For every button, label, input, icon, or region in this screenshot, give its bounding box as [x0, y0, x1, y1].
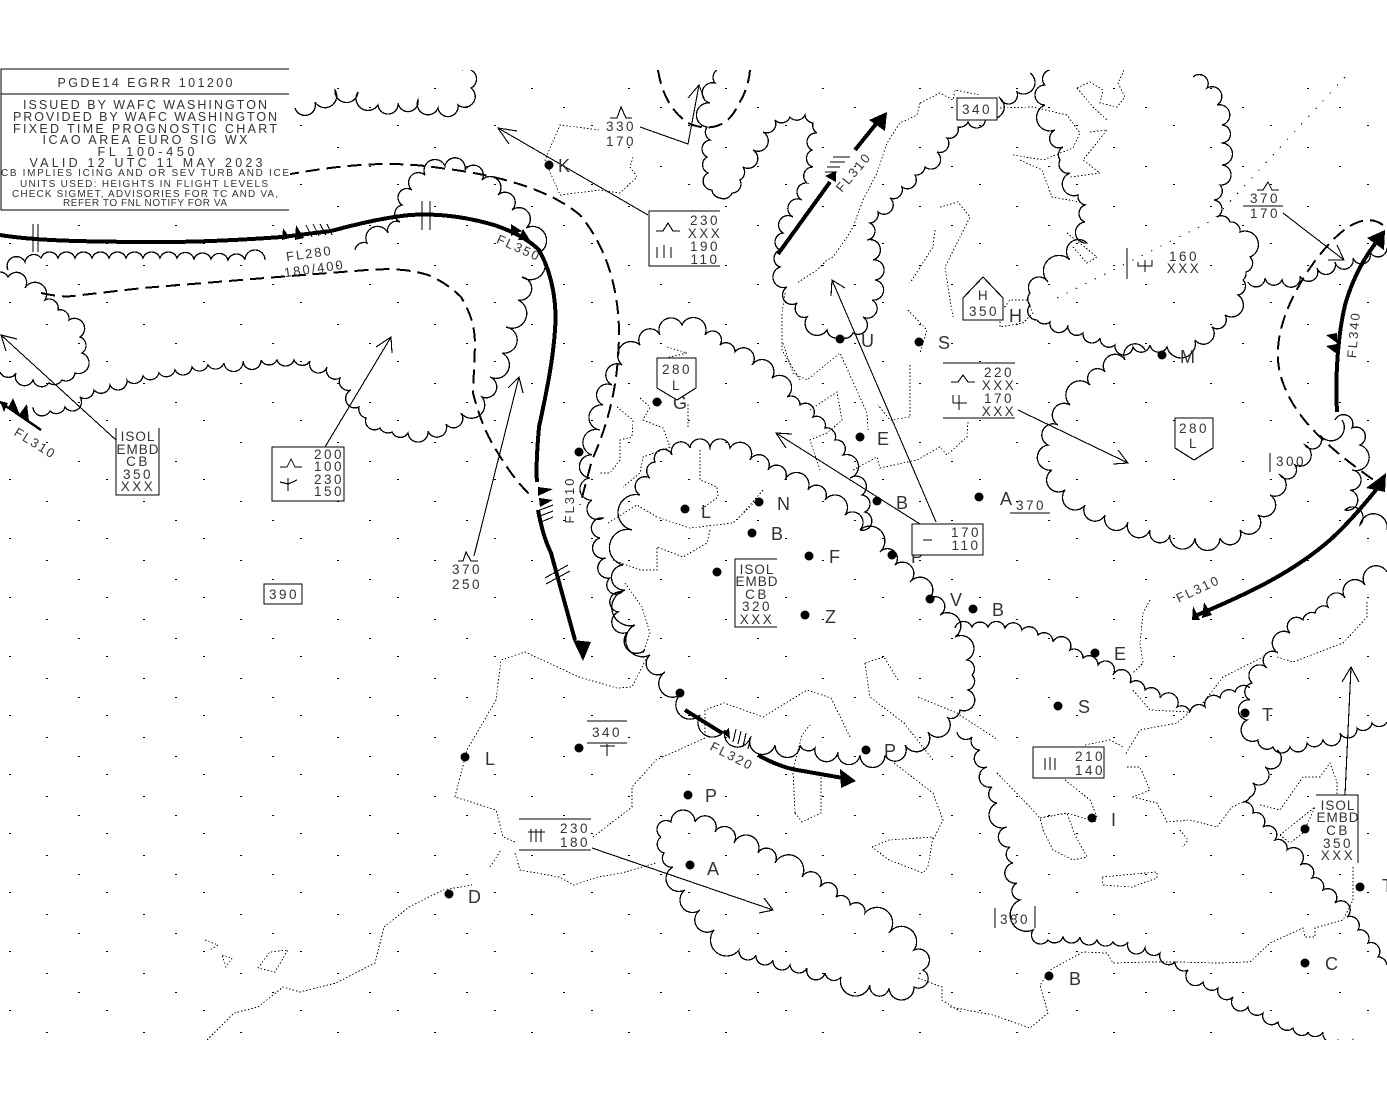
- issuer text: UNITS USED: HEIGHTS IN FLIGHT LEVELS: [20, 179, 268, 190]
- CB box middle east: XXX: [1321, 848, 1355, 863]
- icing box germany: 110: [951, 538, 981, 553]
- tropopause hexagon H 350: [963, 277, 1003, 320]
- arrow: to mediterranean: [592, 848, 773, 913]
- CB box france: 320: [742, 599, 772, 614]
- arrow: to east: [1283, 213, 1344, 260]
- city labels: E: [1114, 644, 1126, 664]
- rotated flight level labels: FL310: [1174, 572, 1223, 606]
- jet: FL310 west: [0, 398, 41, 430]
- city labels: U: [861, 331, 874, 351]
- icing box spain 340: [587, 721, 627, 756]
- cloud: atlantic west lobe: [0, 272, 89, 387]
- CAT area: north sea: [658, 70, 750, 127]
- jet: FL340 east: [1326, 230, 1385, 412]
- tropopause label 300 russia: 300: [1276, 454, 1306, 469]
- city labels: L: [485, 749, 495, 769]
- turbulence box atlantic: 230: [314, 472, 344, 487]
- city labels: P: [884, 741, 896, 761]
- CB box middle east: [1316, 795, 1360, 863]
- jet: FL320 mediterranean: [685, 710, 856, 788]
- coastlines: [205, 68, 1367, 1040]
- cloud: western europe outer: [579, 317, 872, 653]
- turbulence box poland: [943, 363, 1016, 419]
- cloud: russia north: [1028, 70, 1387, 358]
- city labels: B: [1069, 969, 1081, 989]
- icing label 160 north russia: XXX: [1167, 261, 1201, 276]
- tropopause hexagon 280 east: [1175, 418, 1213, 460]
- CB box middle east: ISOL: [1321, 798, 1355, 813]
- tropopause label 370 east: 370: [1250, 191, 1280, 206]
- tropopause hexagon 280 east: L: [1189, 436, 1199, 451]
- tropopause label 330: 330: [606, 119, 636, 134]
- city labels: H: [1009, 306, 1022, 326]
- jet streams: [0, 112, 1386, 788]
- cloud: atlantic band: [7, 158, 547, 442]
- rotated flight level labels: FL280: [285, 243, 334, 264]
- issuer text: CHECK SIGMET, ADVISORIES FOR TC AND VA,: [12, 189, 278, 200]
- cloud: central europe: [609, 439, 975, 768]
- rotated flight level labels: FL310: [12, 424, 59, 462]
- arrow: to russia: [1018, 410, 1128, 464]
- turbulence box poland: XXX: [982, 378, 1016, 393]
- CB box middle east: EMBD: [1316, 810, 1360, 825]
- turbulence box poland: 220: [984, 365, 1014, 380]
- turbulence box iceland: 230: [690, 213, 720, 228]
- CAT area: north Atlantic: [285, 164, 619, 505]
- city labels: F: [829, 547, 840, 567]
- icing box iberia: 180: [560, 835, 590, 850]
- arrow: to scandinavia: [831, 280, 936, 522]
- tropopause label 380 africa: 380: [1000, 912, 1030, 927]
- tropopause label 300 russia: [1270, 453, 1306, 472]
- tropopause box 340 north: 340: [962, 102, 992, 117]
- CB box france: XXX: [740, 612, 774, 627]
- city labels: T: [1262, 705, 1273, 725]
- icing box germany: [912, 524, 983, 555]
- city labels: E: [877, 429, 889, 449]
- turbulence box iceland: 110: [690, 252, 720, 267]
- city labels: V: [950, 590, 962, 610]
- city labels: A: [1000, 489, 1012, 509]
- high tropopause hexagon 280 L: [657, 358, 696, 400]
- arrow: to north sea: [640, 85, 705, 144]
- city labels: G: [673, 393, 687, 413]
- turbulence box atlantic: 200: [314, 447, 344, 462]
- city labels: B: [896, 493, 908, 513]
- high tropopause hexagon 280 L: 280: [662, 362, 692, 377]
- tropopause box 340 north: [957, 98, 997, 120]
- cloud: eastern mediterranean: [955, 621, 1387, 1050]
- arrow: to middle east: [1342, 667, 1359, 795]
- issuer text: ICAO AREA EURO SIG WX: [42, 133, 248, 147]
- issuer text: ISSUED BY WAFC WASHINGTON: [23, 98, 267, 112]
- city labels: N: [777, 494, 790, 514]
- issuer text: VALID 12 UTC 11 MAY 2023: [30, 156, 263, 170]
- jet: FL310 scandinavia: [778, 112, 887, 254]
- turbulence box poland: XXX: [982, 404, 1016, 419]
- city labels: Z: [825, 607, 836, 627]
- tropopause box 390: [264, 584, 302, 604]
- city labels: [468, 156, 1387, 989]
- cloud: scandinavia: [696, 70, 1035, 338]
- jet: FL280 / FL350 atlantic: [0, 201, 591, 661]
- rotated flight level labels: FL320: [708, 739, 756, 773]
- icing box iberia: [519, 819, 591, 850]
- icing box greece: 210: [1075, 749, 1105, 764]
- high tropopause hexagon 280 L: L: [672, 378, 682, 393]
- tropopause label 330: 170: [606, 134, 636, 149]
- tropopause label 380 africa: [995, 906, 1035, 928]
- city labels: B: [771, 524, 783, 544]
- turbulence dashed boundaries: [41, 70, 1385, 505]
- issuer text: PROVIDED BY WAFC WASHINGTON: [13, 110, 277, 124]
- turbulence box atlantic: [272, 447, 344, 501]
- cloud: middle east: [1238, 566, 1387, 753]
- tropopause hexagon H 350: 350: [969, 304, 999, 319]
- CB box atlantic: CB: [126, 454, 150, 469]
- icing label 160 north russia: 160: [1169, 249, 1199, 264]
- CB box atlantic: [116, 427, 160, 495]
- city labels: K: [558, 156, 570, 176]
- CB box atlantic: EMBD: [116, 442, 160, 457]
- turbulence box iceland: XXX: [688, 226, 722, 241]
- CB box middle east: CB: [1326, 823, 1350, 838]
- city labels: M: [1180, 347, 1195, 367]
- city labels: B: [992, 600, 1004, 620]
- icing box iberia: 230: [560, 821, 590, 836]
- CB box atlantic: ISOL: [121, 429, 155, 444]
- issuer text: REFER TO FNL NOTIFY FOR VA: [63, 198, 227, 209]
- city labels: S: [1078, 697, 1090, 717]
- arrow: to atlantic lobe: [325, 337, 392, 447]
- issuer text: FL 100-450: [98, 145, 195, 159]
- jet: FL310 russia: [1192, 473, 1386, 620]
- CB box france: ISOL: [740, 562, 774, 577]
- tropopause label 370 east: 170: [1250, 206, 1280, 221]
- icing box greece: [1033, 747, 1105, 778]
- CB box middle east: 350: [1323, 836, 1353, 851]
- arrow: to germany: [776, 433, 920, 524]
- CB box atlantic: XXX: [121, 479, 155, 494]
- issuer text: FIXED TIME PROGNOSTIC CHART: [13, 122, 277, 136]
- icing box greece: 140: [1075, 763, 1105, 778]
- CB box france: CB: [745, 587, 769, 602]
- cloud: russia central: [1037, 344, 1387, 550]
- rotated flight level labels: FL350: [494, 232, 543, 264]
- rotated flight level labels: FL340: [1344, 311, 1363, 359]
- rotated flight level labels: [12, 149, 1363, 773]
- city markers: [444, 160, 1364, 980]
- tropopause box 390: 390: [269, 587, 299, 602]
- tropopause label 370 poland: 370: [1016, 498, 1046, 513]
- city labels: P: [705, 786, 717, 806]
- turbulence box atlantic: 150: [314, 484, 344, 499]
- arrow: to north atlantic: [498, 128, 648, 215]
- icing label 160 north russia: [1127, 248, 1201, 279]
- icing box germany: 170: [951, 525, 981, 540]
- turbulence box iceland: [649, 211, 722, 267]
- leader arrows: [1, 85, 1359, 913]
- rotated flight level labels: FL310: [833, 149, 874, 195]
- rotated flight level labels: 180/400: [283, 257, 346, 280]
- tropopause label 370/250: [452, 552, 482, 592]
- arrow: to west atlantic: [1, 335, 116, 440]
- tropopause label 330: [606, 107, 636, 149]
- city labels: S: [938, 333, 950, 353]
- tropopause label 370/250: 250: [452, 577, 482, 592]
- arrow: to bay of biscay: [474, 377, 523, 556]
- icing box spain 340: 340: [592, 725, 622, 740]
- CAT area: east: [1278, 220, 1385, 488]
- city labels: L: [701, 502, 711, 522]
- CB box france: [735, 559, 779, 628]
- CB box france: EMBD: [735, 574, 779, 589]
- tropopause hexagon H 350: H: [978, 288, 990, 303]
- turbulence box iceland: 190: [690, 239, 720, 254]
- city labels: D: [468, 887, 481, 907]
- tropopause label 370 east: [1243, 182, 1283, 221]
- CAT area: Atlantic loop: [41, 269, 530, 495]
- cloud: western mediterranean: [657, 810, 929, 1000]
- issuer text: [1, 98, 289, 209]
- CB box atlantic: 350: [123, 467, 153, 482]
- city labels: P: [911, 547, 923, 567]
- cloud: north atlantic: [295, 69, 477, 117]
- city labels: C: [1325, 954, 1338, 974]
- issuer text: CB IMPLIES ICING AND OR SEV TURB AND ICE: [1, 168, 289, 179]
- header panel: [0, 69, 290, 211]
- city labels: I: [1111, 810, 1116, 830]
- tropopause hexagon 280 east: 280: [1179, 421, 1209, 436]
- turbulence box atlantic: 100: [314, 459, 344, 474]
- rotated flight level labels: FL310: [562, 477, 577, 523]
- turbulence box poland: 170: [984, 391, 1014, 406]
- city labels: A: [707, 859, 719, 879]
- tropopause label 370/250: 370: [452, 562, 482, 577]
- chart id: PGDE14 EGRR 101200: [58, 76, 233, 90]
